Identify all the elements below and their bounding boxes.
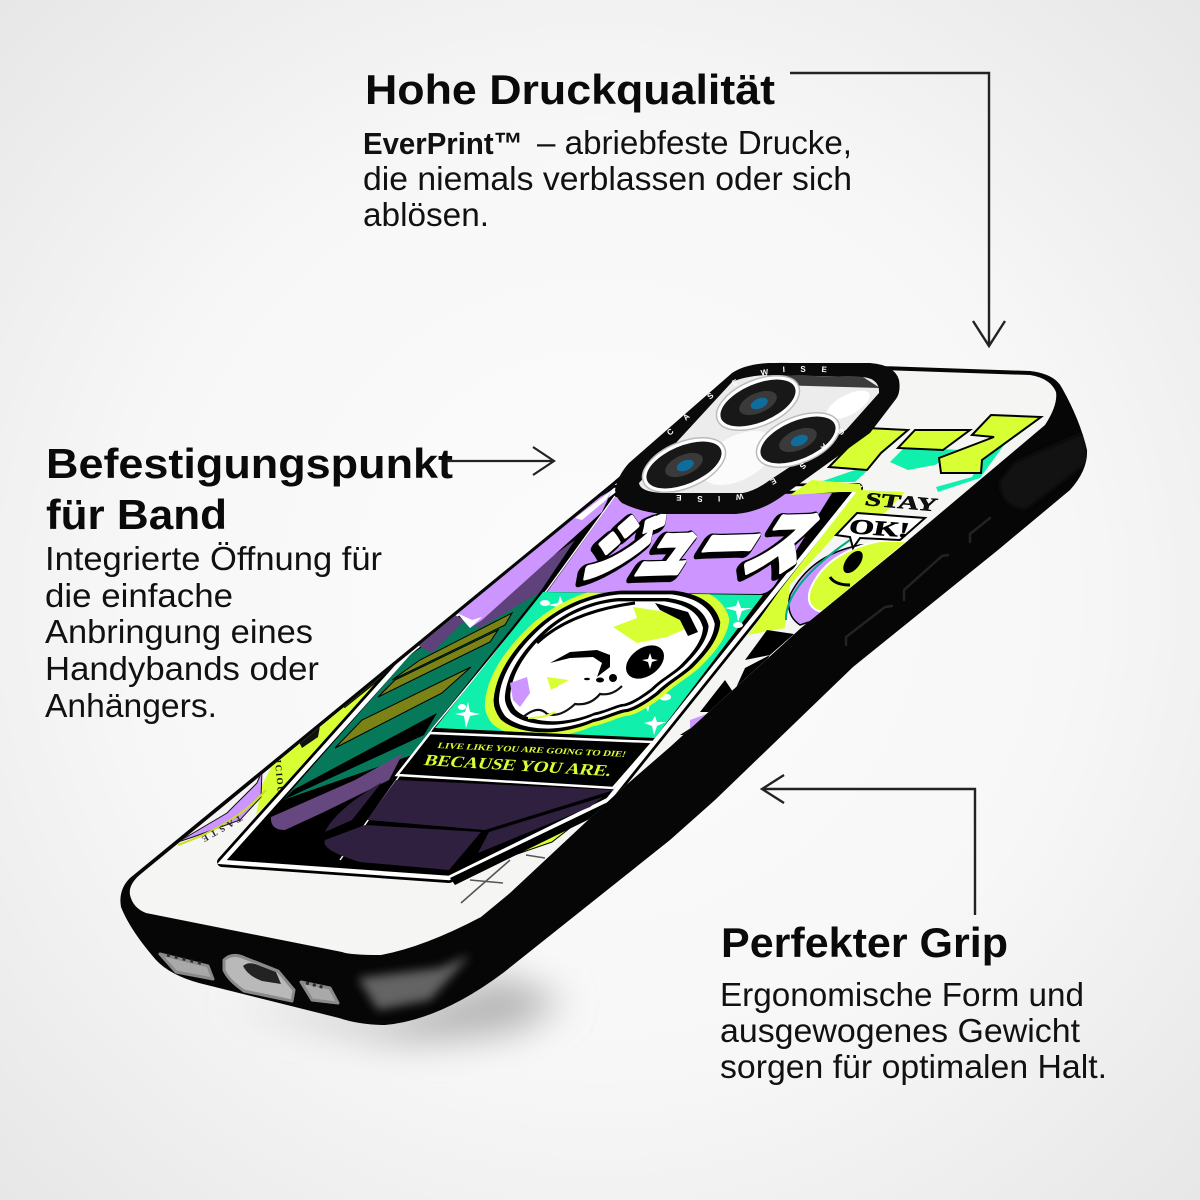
smiley purple ring	[789, 543, 905, 625]
lime arc	[790, 480, 862, 495]
crown streak	[655, 603, 698, 636]
frame	[222, 488, 858, 878]
skull face	[510, 601, 703, 721]
side buttons	[846, 518, 990, 645]
top arc	[537, 603, 635, 643]
circular small text: ICIOUS	[273, 759, 287, 801]
purple circle arc	[178, 771, 262, 842]
text block: grip: sorgen für optimalen Halt.	[720, 1048, 1107, 1085]
phone shadow	[225, 975, 565, 1041]
heading: Befestigungspunkt: für Band	[46, 491, 227, 538]
heading: Befestigungspunkt	[46, 440, 453, 538]
ring brand text: A	[681, 412, 692, 422]
taste arc text: TASTE	[197, 813, 244, 846]
lens right	[749, 402, 847, 478]
ring brand text: E	[675, 493, 682, 502]
bottom speaker right	[301, 982, 338, 1003]
text block: grip: Ergonomische Form und	[720, 976, 1084, 1013]
sparkles	[455, 596, 752, 735]
lens top	[709, 365, 807, 441]
purple title panel	[547, 493, 832, 594]
lens left	[635, 427, 733, 503]
heading: Hohe Druckqualität: Hohe Druckqualität	[365, 66, 775, 113]
lime left area	[256, 672, 392, 815]
teal letter shadows	[823, 444, 1004, 492]
teal skull panel	[435, 592, 763, 738]
mid purple wedge	[417, 540, 575, 653]
caption box	[397, 733, 653, 788]
japanese title: ジュース	[561, 490, 842, 598]
wink eye	[550, 650, 610, 677]
ok speech bubble	[836, 513, 925, 548]
text block: Öffnung	[45, 540, 382, 724]
text block: Öffnung: Anhängers.	[45, 687, 217, 724]
phone with printed case	[120, 363, 1088, 1025]
skull halo	[485, 586, 729, 738]
thin inner line	[340, 496, 615, 860]
light purple flap	[457, 490, 612, 628]
case body	[120, 363, 1087, 1025]
camera ring	[615, 363, 900, 514]
ring brand text: W	[760, 367, 770, 378]
lime crown	[613, 607, 690, 643]
nose holes	[596, 678, 604, 682]
text block: Öffnung: Integrierte Öffnung für	[45, 540, 382, 577]
text block: EverPrint: ablösen.	[363, 196, 489, 233]
arrow: grip	[762, 775, 975, 915]
open eye	[626, 645, 664, 679]
lower lime sliver	[496, 828, 570, 860]
ok text: OK!	[847, 514, 912, 542]
ring brand text: I	[782, 365, 785, 374]
heading: Befestigungspunkt: Befestigungspunkt	[46, 440, 453, 487]
smiley	[786, 540, 908, 625]
ring brand text: S	[800, 365, 806, 374]
ring brand text: I	[718, 494, 720, 503]
side cutout	[1000, 432, 1088, 510]
arrow: strap point	[447, 447, 554, 475]
text block: Öffnung: die einfache	[45, 577, 233, 614]
text block: Öffnung: Handybands oder	[45, 650, 319, 687]
ring brand text: C	[665, 427, 676, 437]
camera window	[639, 375, 879, 493]
printed artwork	[178, 415, 1041, 903]
japanese title: ジュース	[565, 488, 846, 595]
teeth scallops	[522, 686, 622, 718]
ring brand text: E	[768, 476, 778, 487]
ring brand text: E	[821, 365, 828, 374]
caption text small: LIVE LIKE YOU ARE GOING TO DIE!	[436, 740, 628, 759]
ring brand text: S	[697, 494, 703, 503]
text block: Öffnung: Anbringung eines	[45, 613, 313, 650]
ring brand text: S	[705, 390, 716, 401]
charging port	[224, 955, 294, 1001]
smiley eye	[839, 547, 867, 577]
text block: EverPrint: EverPrint™	[363, 126, 523, 161]
green panel	[283, 592, 540, 800]
corner highlight on case	[358, 955, 470, 1010]
japanese title	[575, 512, 820, 588]
stay label	[836, 489, 940, 548]
text block: EverPrint: die niemals verblassen oder sich	[363, 160, 852, 197]
skull	[485, 586, 729, 738]
ring brand text: E	[731, 377, 740, 388]
ring brand text: C	[836, 426, 846, 437]
arrow: print quality	[790, 73, 1005, 346]
skull outlines	[495, 592, 719, 731]
text block: grip: ausgewogenes Gewicht	[720, 1012, 1080, 1049]
ring brand text	[665, 365, 846, 503]
heading: Perfekter Grip: Perfekter Grip	[721, 919, 1008, 966]
right lower comic panel	[675, 640, 815, 745]
bottom speaker left	[160, 954, 213, 979]
stay text: STAY	[863, 489, 940, 516]
cross marks	[461, 855, 545, 903]
lime right field	[748, 490, 905, 635]
case back surface	[130, 366, 1056, 955]
lime letters top right	[820, 415, 1041, 492]
lime nose triangle	[547, 677, 569, 690]
ring brand text: W	[734, 491, 744, 502]
camera inner shade	[692, 375, 880, 496]
caption text large: BECAUSE YOU ARE.	[422, 751, 615, 780]
smiley mouth	[830, 577, 850, 585]
olive stripes	[335, 613, 512, 748]
ring brand text: S	[797, 461, 808, 471]
text block: grip	[720, 976, 1107, 1085]
smiley face	[809, 541, 908, 612]
text block: EverPrint	[363, 124, 852, 233]
black band	[283, 713, 437, 800]
camera bump	[615, 363, 900, 514]
purple shadow	[510, 677, 530, 707]
ring brand text: A	[819, 441, 829, 452]
dark floor panels	[271, 753, 403, 830]
text block: EverPrint: – abriebfeste Drucke,	[537, 124, 852, 161]
